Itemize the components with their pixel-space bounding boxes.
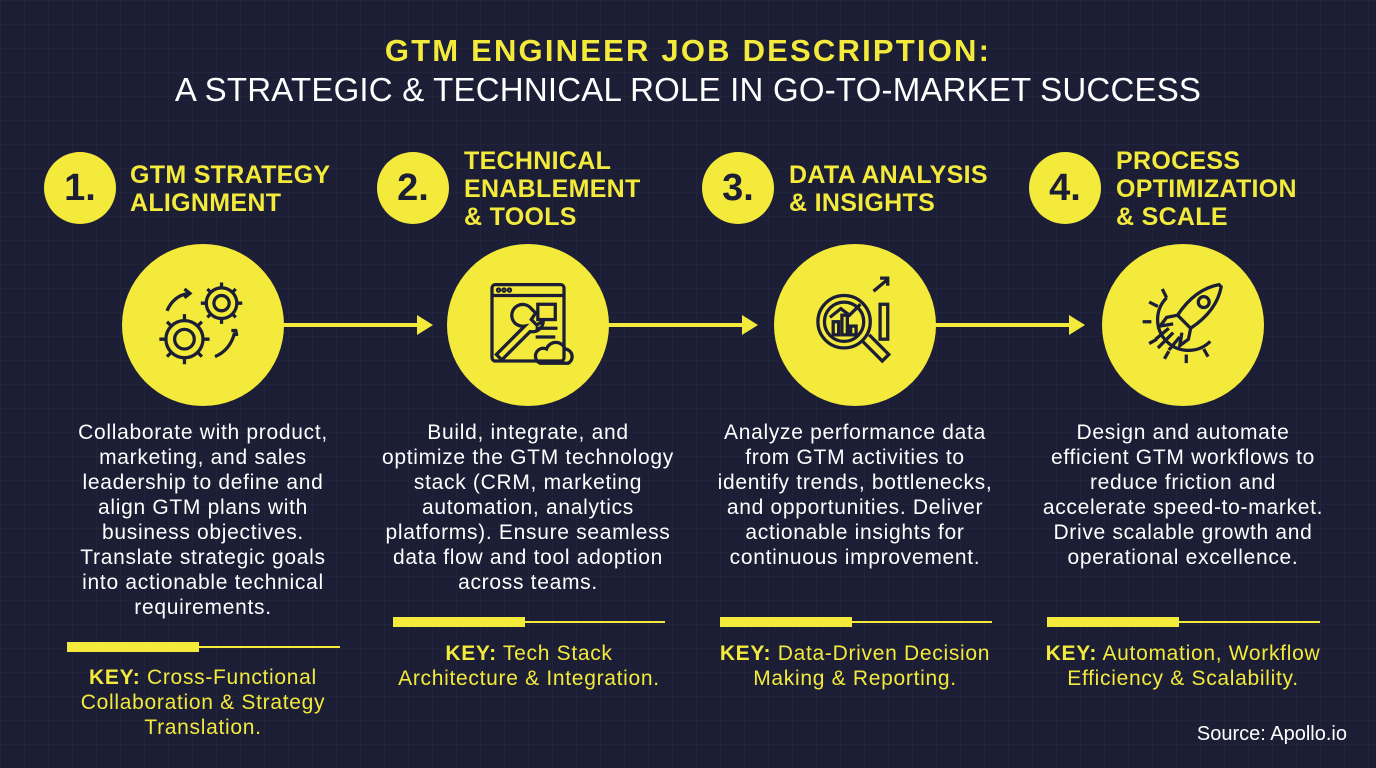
key bar 4: [1047, 617, 1320, 627]
body text 3: continuous improvement.: [730, 546, 980, 569]
number badge 2: 2.: [397, 166, 429, 208]
key text 1: Collaboration & Strategy: [81, 691, 325, 714]
body text 2: across teams.: [458, 571, 598, 594]
number badge 4: 4.: [1049, 166, 1081, 208]
number badge 3: [702, 152, 774, 224]
body text 4: [1043, 421, 1323, 569]
body text 3: [718, 421, 992, 569]
heading 1: GTM STRATEGY: [130, 161, 330, 189]
number badge 1: 1.: [64, 166, 96, 208]
body text 1: business objectives.: [102, 521, 304, 544]
arrow 3: [936, 315, 1085, 335]
body text 1: leadership to define and: [82, 471, 323, 494]
body text 1: requirements.: [134, 596, 272, 619]
body text 1: [78, 421, 328, 619]
body text 3: Analyze performance data: [724, 421, 986, 444]
body text 2: Build, integrate, and: [427, 421, 629, 444]
key text 2: KEY: Tech Stack: [445, 642, 613, 665]
heading 3: DATA ANALYSIS: [789, 161, 988, 189]
body text 1: Collaborate with product,: [78, 421, 328, 444]
heading 1: ALIGNMENT: [130, 189, 281, 217]
body text 2: stack (CRM, marketing: [414, 471, 642, 494]
number badge 3: 3.: [722, 166, 754, 208]
heading 4: [1116, 147, 1297, 231]
body text 4: accelerate speed-to-market.: [1043, 496, 1323, 519]
heading 3: [789, 161, 988, 217]
body text 2: optimize the GTM technology: [382, 446, 674, 469]
title: A STRATEGIC & TECHNICAL ROLE IN GO-TO-MARKET SUCCESS: [175, 71, 1201, 108]
key text 4: [1046, 642, 1320, 690]
number badge 1: [44, 152, 116, 224]
body text 4: operational excellence.: [1068, 546, 1298, 569]
heading 4: & SCALE: [1116, 203, 1228, 231]
key text 3: [720, 642, 990, 690]
key bar 3: [720, 617, 992, 627]
title: GTM ENGINEER JOB DESCRIPTION:: [385, 33, 991, 68]
body text 4: Drive scalable growth and: [1053, 521, 1313, 544]
title: [175, 33, 1201, 108]
body text 1: Translate strategic goals: [80, 546, 326, 569]
body text 2: [382, 421, 674, 594]
key text 2: [398, 642, 660, 690]
body text 4: reduce friction and: [1090, 471, 1276, 494]
icon circle 3: analytics: [774, 244, 936, 406]
heading 2: TECHNICAL: [464, 147, 611, 175]
heading 3: & INSIGHTS: [789, 189, 935, 217]
heading 2: ENABLEMENT: [464, 175, 641, 203]
key text 4: KEY: Automation, Workflow: [1046, 642, 1320, 665]
key text 1: [81, 666, 325, 739]
body text 4: efficient GTM workflows to: [1051, 446, 1315, 469]
body text 3: identify trends, bottlenecks,: [718, 471, 992, 494]
heading 2: & TOOLS: [464, 203, 577, 231]
key bar 1: [67, 642, 340, 652]
body text 2: platforms). Ensure seamless: [386, 521, 670, 544]
arrow 1: [284, 315, 433, 335]
key text 1: Translation.: [144, 716, 262, 739]
icon circle 1: gears: [122, 244, 284, 406]
key bar 2: [393, 617, 665, 627]
key text 4: Efficiency & Scalability.: [1067, 667, 1299, 690]
body text 3: actionable insights for: [745, 521, 965, 544]
source: Source: Apollo.io: [1197, 723, 1347, 745]
body text 3: and opportunities. Deliver: [727, 496, 983, 519]
number badge 4: [1029, 152, 1101, 224]
icon circle 4: rocket gear: [1102, 244, 1264, 406]
heading 4: OPTIMIZATION: [1116, 175, 1297, 203]
body text 3: from GTM activities to: [745, 446, 965, 469]
body text 2: data flow and tool adoption: [393, 546, 663, 569]
key text 1: KEY: Cross-Functional: [89, 666, 317, 689]
key text 3: KEY: Data-Driven Decision: [720, 642, 990, 665]
body text 1: align GTM plans with: [98, 496, 308, 519]
number badge 2: [377, 152, 449, 224]
key text 3: Making & Reporting.: [753, 667, 957, 690]
icon circle 2: tools: [447, 244, 609, 406]
body text 4: Design and automate: [1077, 421, 1289, 444]
body text 1: marketing, and sales: [99, 446, 307, 469]
key text 2: Architecture & Integration.: [398, 667, 660, 690]
arrow 2: [608, 315, 758, 335]
heading 4: PROCESS: [1116, 147, 1240, 175]
body text 2: automation, analytics: [422, 496, 634, 519]
heading 2: [464, 147, 641, 231]
heading 1: [130, 161, 330, 217]
body text 1: into actionable technical: [82, 571, 324, 594]
